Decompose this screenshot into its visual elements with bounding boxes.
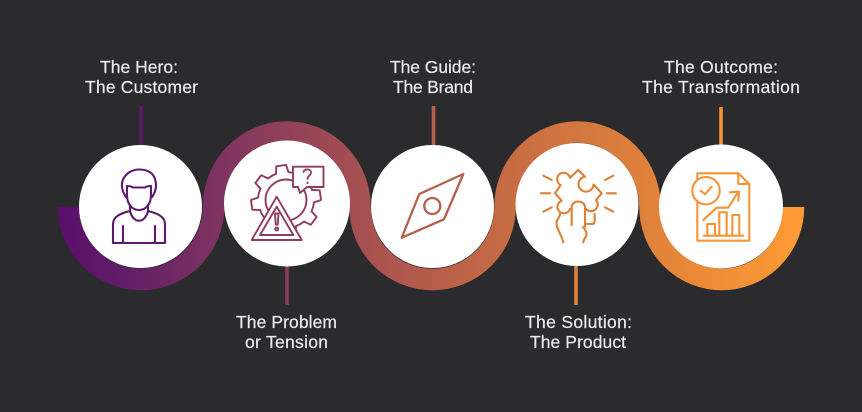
icon: puzzle hand: [541, 170, 616, 242]
label: problem: The Problem: [236, 312, 337, 332]
label: outcome: The Outcome:: [664, 57, 778, 77]
label: guide: The Brand: [393, 77, 473, 97]
label: hero: [85, 57, 198, 97]
label: guide: The Guide:: [390, 57, 476, 77]
label: hero: The Customer: [85, 77, 198, 97]
icon: report with chart: [692, 173, 749, 241]
connector: hero: [139, 106, 143, 146]
circle: problem: [224, 140, 350, 266]
wavy ribbon: [68, 132, 794, 280]
connector: guide: [432, 106, 435, 146]
icon: person: [113, 170, 165, 243]
connector: problem: [285, 265, 289, 305]
circle: outcome: [659, 144, 783, 268]
label: solution: The Product: [530, 332, 626, 352]
label: solution: [525, 312, 632, 352]
label: outcome: [642, 57, 800, 97]
circle: solution: [516, 143, 638, 266]
label: problem: or Tension: [245, 332, 328, 352]
connector: outcome: [719, 107, 723, 147]
circle: guide: [371, 145, 494, 268]
label: hero: The Hero:: [100, 57, 178, 77]
circle: hero: [79, 145, 202, 268]
label: solution: The Solution:: [525, 312, 632, 332]
label: outcome: The Transformation: [642, 77, 800, 97]
label: guide: [390, 57, 476, 97]
connector: solution: [574, 265, 578, 305]
icon: gear with warning and question: [246, 160, 326, 240]
label: problem: [236, 312, 337, 352]
icon: compass: [402, 174, 463, 238]
